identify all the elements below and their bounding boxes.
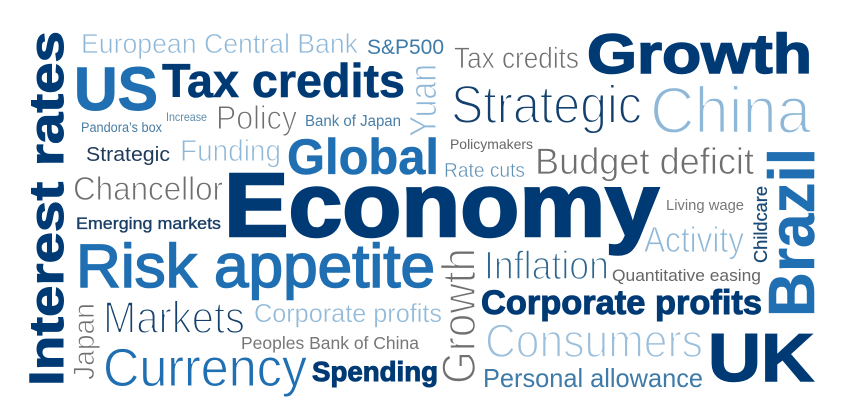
- word: Childcare: Childcare: [751, 186, 771, 263]
- word: Budget deficit: Budget deficit: [535, 141, 755, 182]
- word: Bank of Japan: Bank of Japan: [305, 113, 401, 130]
- word: Tax credits bold: Tax credits: [162, 54, 405, 107]
- word: Economy: Economy: [224, 156, 659, 256]
- word: Living wage: Living wage: [666, 198, 744, 214]
- word: Increase: Increase: [166, 110, 207, 124]
- word: Japan: Japan: [68, 303, 101, 380]
- word: Strategic small: Strategic: [86, 143, 170, 166]
- word: Activity: Activity: [644, 219, 744, 260]
- word: Global: Global: [287, 129, 439, 185]
- word: Brazil: Brazil: [755, 148, 828, 317]
- word: European Central Bank: European Central Bank: [81, 28, 359, 59]
- word: Yuan: Yuan: [403, 64, 445, 137]
- word: Currency: Currency: [103, 338, 307, 398]
- word: Inflation: Inflation: [484, 244, 609, 288]
- word: Personal allowance: Personal allowance: [483, 363, 703, 393]
- word: Corporate profits bold: Corporate profits: [481, 284, 762, 322]
- word: Quantitative easing: Quantitative easing: [612, 266, 761, 285]
- word: Consumers: Consumers: [485, 314, 703, 367]
- word: Emerging markets: Emerging markets: [76, 215, 221, 233]
- word: Peoples Bank of China: Peoples Bank of China: [241, 333, 419, 353]
- word: Markets: Markets: [103, 292, 245, 343]
- word: Policy: Policy: [216, 99, 297, 136]
- word: Strategic large: Strategic: [451, 75, 642, 135]
- word: Chancellor: Chancellor: [73, 170, 223, 207]
- word: Pandora's box: Pandora’s box: [81, 120, 162, 135]
- word: Tax credits grey: Tax credits: [454, 42, 579, 75]
- word: Growth bold: Growth: [587, 22, 812, 85]
- word: UK: UK: [708, 320, 814, 396]
- word: Funding: Funding: [180, 133, 281, 168]
- word: Policymakers: Policymakers: [450, 136, 533, 152]
- word: Corporate profits light: Corporate profits: [254, 298, 442, 328]
- word: Rate cuts: Rate cuts: [444, 159, 525, 182]
- word: Spending: Spending: [312, 356, 438, 387]
- word: S&P500: S&P500: [367, 36, 444, 59]
- word: Growth vertical: Growth: [432, 248, 485, 384]
- word: China: China: [650, 73, 811, 147]
- word: Interest rates: Interest rates: [21, 31, 74, 386]
- word: Risk appetite: Risk appetite: [76, 232, 435, 300]
- word: US: US: [74, 55, 158, 123]
